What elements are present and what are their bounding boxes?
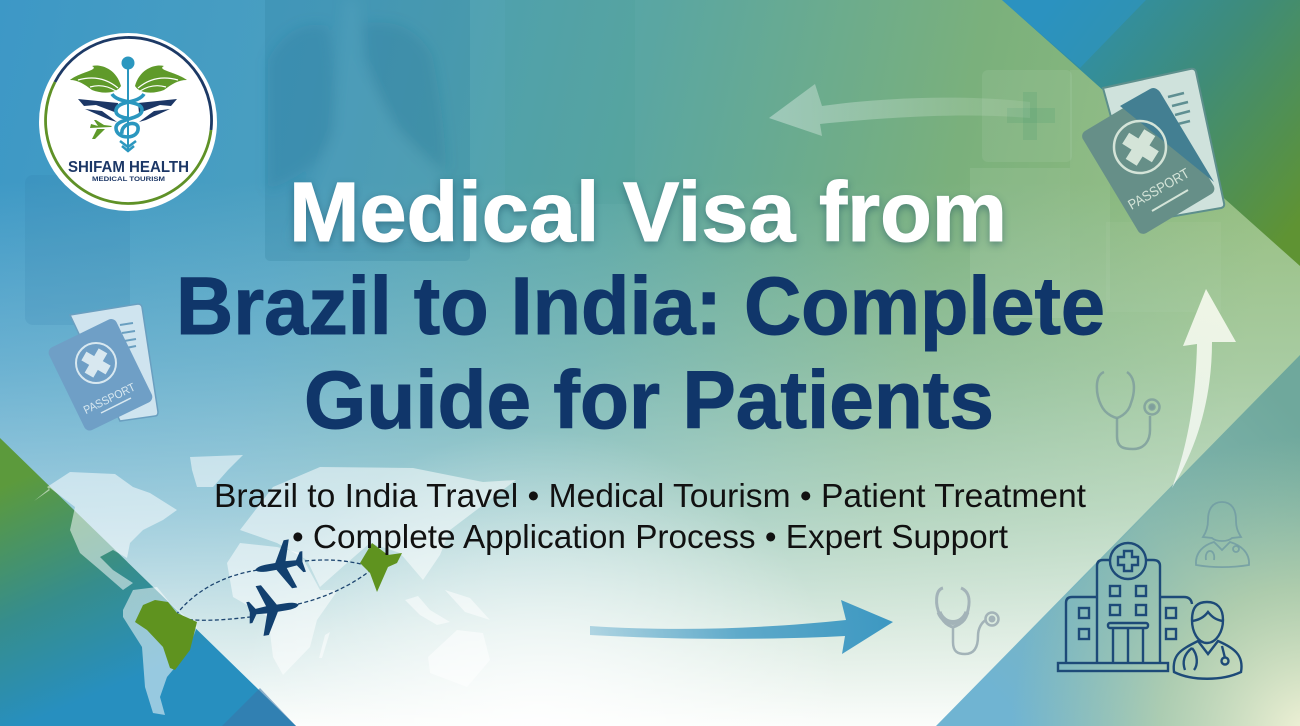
map: australia (428, 630, 490, 687)
icon: hospital (1058, 543, 1192, 671)
map: north america (34, 472, 177, 590)
passport: label: PASSPORT (1125, 165, 1192, 213)
passport: paper (1103, 69, 1224, 222)
country: brazil (135, 600, 197, 670)
corner: bottom left (0, 438, 296, 726)
map: greenland (190, 455, 243, 487)
world map (34, 455, 516, 715)
logo: wings navy (78, 99, 177, 122)
passport: paper (70, 304, 158, 421)
map: madagascar (319, 632, 330, 658)
title: line 2: Brazil to India: Complete (176, 261, 1105, 352)
icon: passport top right (1080, 69, 1224, 236)
passport: paper lines (120, 323, 136, 348)
passport: emblem (76, 343, 116, 383)
title: line 1: Medical Visa from (289, 165, 1007, 259)
logo: plane (90, 120, 112, 139)
background panel: centre tile (505, 0, 635, 204)
subtitle: line 2: • Complete Application Process • Expert Support (292, 518, 1008, 555)
passport: label: PASSPORT (82, 382, 137, 417)
country: india (360, 543, 402, 592)
icon: passport left (47, 304, 158, 433)
passport: cover (47, 317, 154, 433)
logo: tagline: MEDICAL TOURISM (92, 176, 165, 183)
subtitle (214, 477, 1086, 555)
logo badge (39, 33, 217, 211)
logo: wing feather lines (78, 78, 178, 91)
map: africa (227, 543, 338, 675)
logo: wings green (70, 66, 187, 93)
corner: top right (1002, 0, 1300, 266)
background panel: chest x-ray (265, 0, 470, 261)
icon: plane upper (251, 537, 308, 594)
icon: female doctor (1196, 502, 1249, 567)
logo: caduceus (112, 56, 144, 152)
logo: name: SHIFAM HEALTH (68, 159, 189, 176)
title: line 3: Guide for Patients (304, 355, 994, 446)
passport: emblem (1114, 121, 1166, 173)
map: south america (123, 587, 197, 715)
icon: male doctor (1174, 602, 1242, 679)
route: brazil to india (176, 560, 372, 620)
icon: stethoscope lower (937, 588, 998, 654)
corner: bottom right (936, 355, 1300, 726)
arrow: bottom blue (590, 600, 893, 654)
map: eurasia (240, 467, 516, 587)
title (176, 165, 1105, 446)
icon: plane lower (244, 580, 303, 638)
subtitle: line 1: Brazil to India Travel • Medical Tourism • Patient Treatment (214, 477, 1086, 514)
map: indonesia (405, 590, 490, 625)
arrow: right curved (1172, 289, 1236, 488)
icon: stethoscope upper (1097, 372, 1160, 449)
passport: paper lines (1168, 93, 1190, 124)
background panel: medical cross tile (970, 70, 1221, 318)
background panel: left scan (25, 175, 130, 325)
arrow: top faint (769, 84, 1030, 136)
passport: cover (1080, 89, 1217, 236)
